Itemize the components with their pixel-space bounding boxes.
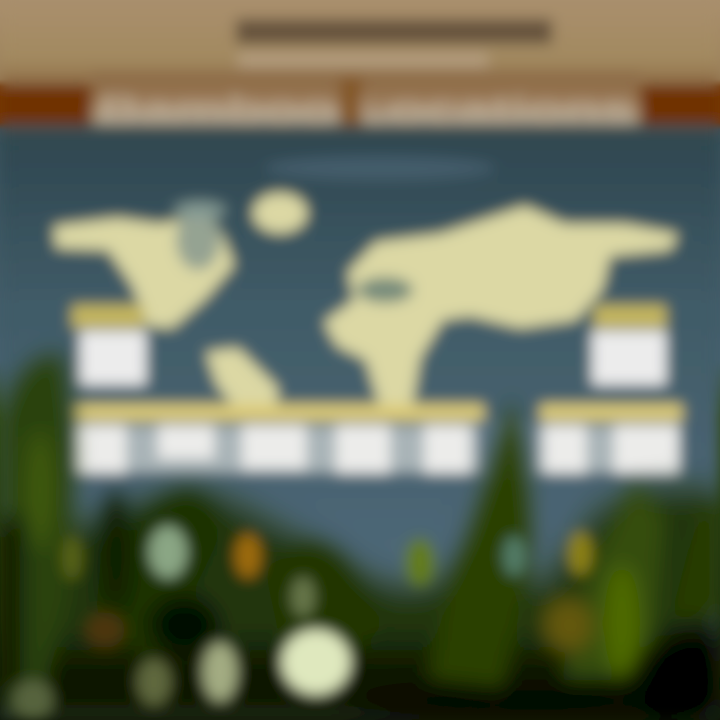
banner left end xyxy=(0,85,90,125)
inland sea xyxy=(357,277,413,303)
world map xyxy=(54,193,678,412)
location row shade xyxy=(76,426,680,472)
centre dark pool xyxy=(350,690,690,720)
subtitle bar xyxy=(238,53,488,67)
flower: large white xyxy=(282,630,350,694)
bud: small olive xyxy=(291,577,315,617)
leaf middle arc xyxy=(265,542,385,665)
foliage mass xyxy=(0,490,720,720)
map label smudge xyxy=(265,156,495,180)
heading text: Bamboo Locations xyxy=(98,89,633,131)
arctic haze xyxy=(174,201,226,219)
flower: medium xyxy=(203,643,237,701)
card: asia pacific xyxy=(592,305,666,385)
amber glow right xyxy=(542,597,594,653)
leaf centre-left arc xyxy=(95,490,219,660)
header panel xyxy=(0,0,720,86)
flower: bottom left xyxy=(13,680,53,720)
bud: pale green xyxy=(149,526,187,578)
leaf centre right tall xyxy=(425,400,532,690)
bud: teal xyxy=(503,536,525,576)
north america xyxy=(54,216,234,328)
banner right end xyxy=(642,85,720,125)
leaf right xyxy=(560,480,665,680)
right dark corner xyxy=(640,628,720,720)
location row cards xyxy=(78,425,678,473)
leaf left highlight xyxy=(26,430,54,550)
dark base xyxy=(0,650,720,720)
bud: rust lower left xyxy=(85,612,125,648)
dark stalk xyxy=(101,490,129,610)
banner bottom edge xyxy=(0,124,720,134)
bud: orange xyxy=(235,534,261,578)
south america xyxy=(206,348,278,412)
leaf far right xyxy=(670,500,720,620)
location row header xyxy=(76,404,682,421)
eurasia and africa xyxy=(324,206,678,408)
title bar xyxy=(236,19,552,44)
yellow-green glow right xyxy=(604,564,640,680)
greenland xyxy=(253,193,307,233)
bud: green right of centre xyxy=(405,538,435,586)
heading divider xyxy=(340,78,362,132)
card: north america xyxy=(72,305,146,385)
hudson bay xyxy=(176,210,220,270)
leaf left shadow xyxy=(0,520,20,690)
flower: dim xyxy=(137,659,171,705)
plants foreground xyxy=(0,355,720,720)
banner centre with heading xyxy=(92,72,640,132)
leaf left tall xyxy=(0,355,74,710)
gap between row groups xyxy=(478,420,538,480)
bud: yellow xyxy=(568,531,592,575)
bud: left olive xyxy=(62,536,82,580)
dark pocket xyxy=(153,599,217,651)
